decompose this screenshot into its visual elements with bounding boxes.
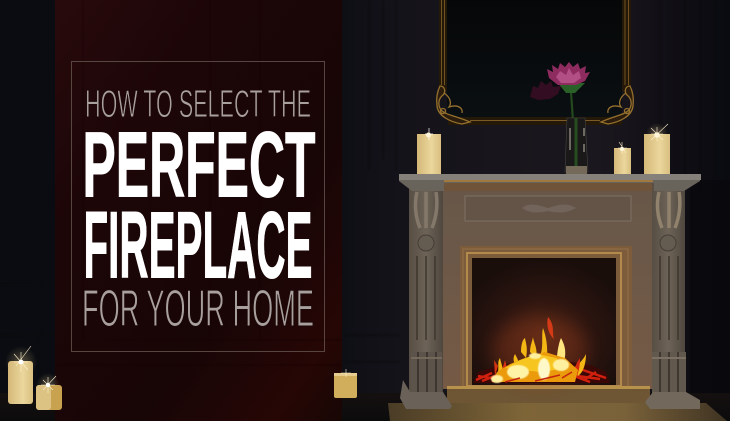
frame scroll left xyxy=(437,86,470,124)
candle: short left xyxy=(36,373,62,410)
right column xyxy=(652,180,686,394)
title box outline xyxy=(72,62,324,352)
candle: left xyxy=(417,128,441,174)
infographic scene: FIREPLACE xyxy=(84,192,312,298)
mantel shelf xyxy=(399,174,701,191)
stem xyxy=(571,92,576,165)
hearth sill xyxy=(447,386,650,403)
firebox opening xyxy=(472,258,616,385)
right base xyxy=(645,392,700,409)
candle: tall left xyxy=(5,346,37,404)
title line: how to select the: HOW TO SELECT THE xyxy=(85,83,311,126)
bright flame core xyxy=(491,352,578,383)
flame tongues xyxy=(498,328,586,376)
vase with flowers xyxy=(530,62,590,174)
title line: for your home: FOR YOUR HOME xyxy=(82,280,314,338)
left base xyxy=(400,380,452,409)
mirror glass xyxy=(447,0,622,117)
candle: right xyxy=(644,123,670,174)
title text xyxy=(82,83,316,338)
candle: small xyxy=(614,142,631,174)
leaves xyxy=(558,83,585,93)
ember bed xyxy=(473,358,610,383)
pink flower xyxy=(547,62,590,85)
hearth floor slab xyxy=(388,403,727,421)
mantel candles xyxy=(417,123,670,174)
red flames xyxy=(547,317,554,339)
left column xyxy=(409,180,443,394)
translucent red panel xyxy=(55,0,342,421)
mantel body xyxy=(443,182,653,389)
mirror frame xyxy=(439,0,631,125)
wall mirror xyxy=(437,0,633,125)
mantel underside xyxy=(443,181,654,191)
candle: floor right of panel xyxy=(334,369,357,398)
glass vase xyxy=(565,118,588,172)
dark flower xyxy=(530,81,561,100)
frame scroll right xyxy=(601,86,633,124)
fireplace xyxy=(399,174,701,409)
surround frame xyxy=(460,246,632,388)
floor candles xyxy=(5,346,357,410)
title line: perfect: PERFECT xyxy=(82,112,316,216)
frieze panel xyxy=(465,196,631,221)
fire xyxy=(473,316,610,384)
